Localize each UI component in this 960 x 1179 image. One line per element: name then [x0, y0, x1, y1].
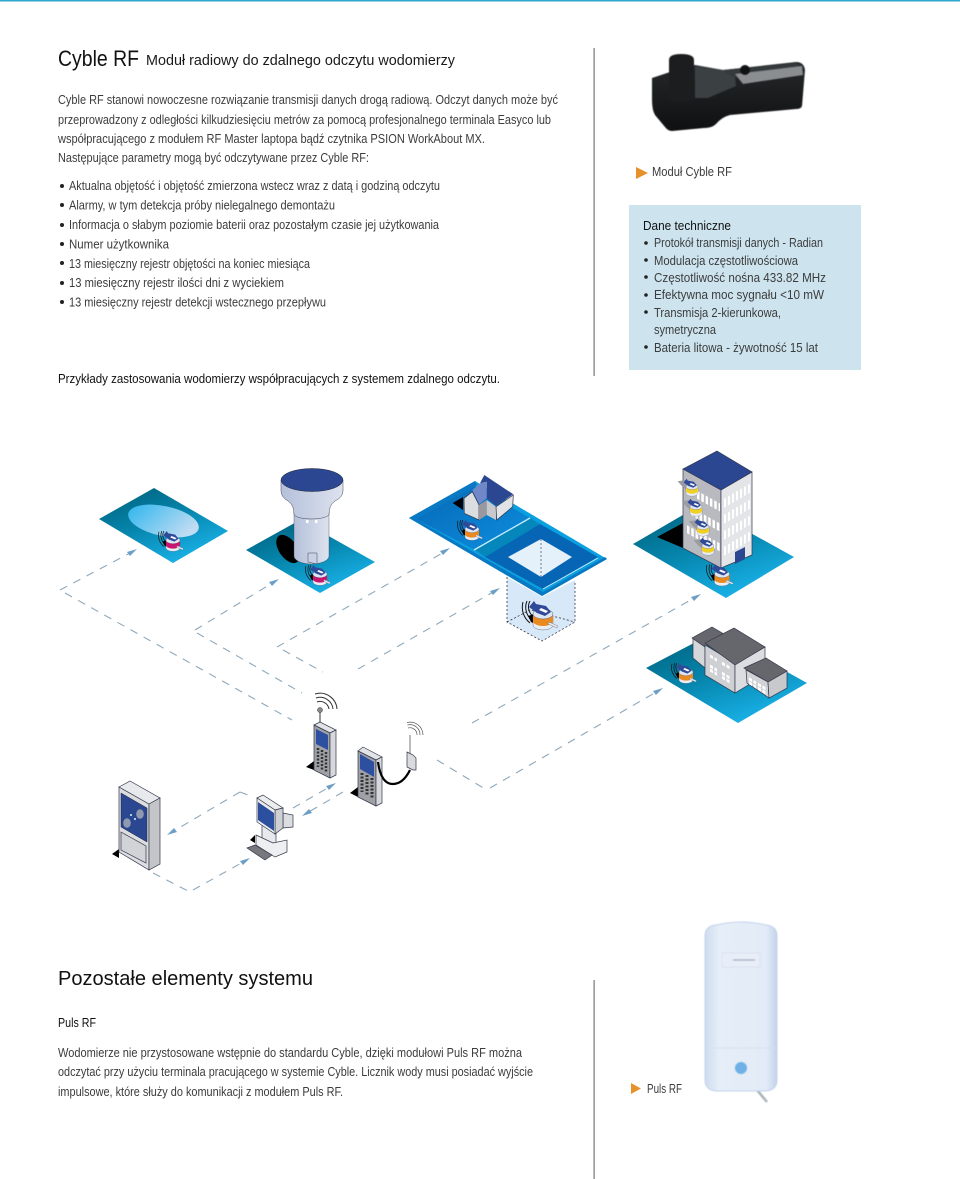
panel: technical data — [629, 205, 861, 370]
bullet list of parameters: 13 miesięczny rejestr detekcji wstecznego przepływu — [69, 296, 326, 310]
panel: technical data: Transmisja 2-kierunkowa, — [654, 306, 781, 320]
Puls RF text block: Wodomierze nie przystosowane wstępnie do standardu Cyble, dzięki modułowi Puls RF można — [58, 1046, 522, 1060]
bullet list of parameters: 13 miesięczny rejestr ilości dni z wyciekiem — [69, 276, 284, 290]
panel: technical data: Bateria litowa - żywotność 15 lat — [654, 341, 818, 355]
intro text block: współpracującego z modułem RF Master laptopa bądź czytnika PSION WorkAbout MX. — [57, 132, 485, 146]
device: desktop computer — [247, 795, 293, 860]
subheading: Puls RF: Puls RF — [58, 1016, 96, 1030]
panel: technical data: Protokół transmisji danych - Radian — [654, 236, 823, 250]
bullet list of parameters: Numer użytkownika — [69, 238, 169, 252]
bullet list of parameters: Informacja o słabym poziomie baterii oraz pozostałym czasie jej użytkowania — [69, 218, 439, 232]
bullet list of parameters: 13 miesięczny rejestr objętości na koniec miesiąca — [69, 257, 310, 271]
bullet list of parameters: Aktualna objętość i objętość zmierzona wstecz wraz z datą i godziną odczytu — [69, 179, 440, 193]
Puls RF text block: impulsowe, które służy do komunikacji z modułem Puls RF. — [58, 1085, 343, 1099]
caption: Puls RF: Puls RF — [647, 1082, 682, 1096]
device: handheld terminal — [306, 693, 337, 778]
bullet list of parameters — [60, 179, 440, 310]
panel: technical data: Modulacja częstotliwościowa — [654, 254, 798, 268]
scene: underground meter box — [507, 577, 575, 641]
panel: technical data: Efektywna moc sygnału <10 mW — [654, 288, 824, 302]
panel: technical data: symetryczna — [654, 323, 716, 337]
caption: Puls RF — [631, 1082, 682, 1096]
vertical divider bottom — [594, 980, 595, 1179]
panel: technical data: Częstotliwość nośna 433.82 MHz — [654, 271, 826, 285]
intro text block: Następujące parametry mogą być odczytywane przez Cyble RF: — [58, 151, 369, 165]
diagram caption: Przykłady zastosowania wodomierzy współpracujących z systemem zdalnego odczytu. — [58, 372, 500, 386]
scene: water tower — [246, 468, 375, 593]
panel: technical data: Dane techniczne — [643, 219, 731, 233]
dashed connection lines — [60, 551, 696, 892]
device: terminal with radio module — [350, 722, 423, 806]
title — [58, 46, 456, 71]
caption: Moduł Cyble RF: Moduł Cyble RF — [652, 165, 732, 179]
vertical divider top — [594, 48, 595, 376]
device: display kiosk — [112, 781, 160, 870]
Puls RF text block: odczytać przy użyciu terminala pracującego w systemie Cyble. Licznik wody musi posiadać wyjście — [58, 1065, 533, 1079]
photo: Puls RF device — [705, 922, 777, 1102]
intro text block: przeprowadzony z odległości kilkudziesięciu metrów za pomocą profesjonalnego terminala Easyco lub — [58, 113, 551, 127]
scene: apartment building — [633, 451, 794, 598]
bullet list of parameters: Alarmy, w tym detekcja próby nielegalnego demontażu — [69, 198, 335, 212]
intro text block — [57, 93, 558, 165]
title: Moduł radiowy do zdalnego odczytu wodomierzy — [146, 53, 456, 69]
photo: Cyble RF module — [652, 54, 805, 131]
top rule — [0, 0, 960, 2]
title: Cyble RF — [58, 46, 139, 71]
heading: other system elements: Pozostałe elementy systemu — [58, 968, 313, 990]
intro text block: Cyble RF stanowi nowoczesne rozwiązanie transmisji danych drogą radiową. Odczyt danych może być — [58, 93, 558, 107]
arrowheads — [127, 548, 701, 865]
scene: factory — [646, 627, 807, 723]
scene: house and manhole plate — [409, 475, 607, 596]
Puls RF text block — [58, 1046, 533, 1099]
scene: lake plate — [99, 488, 228, 563]
